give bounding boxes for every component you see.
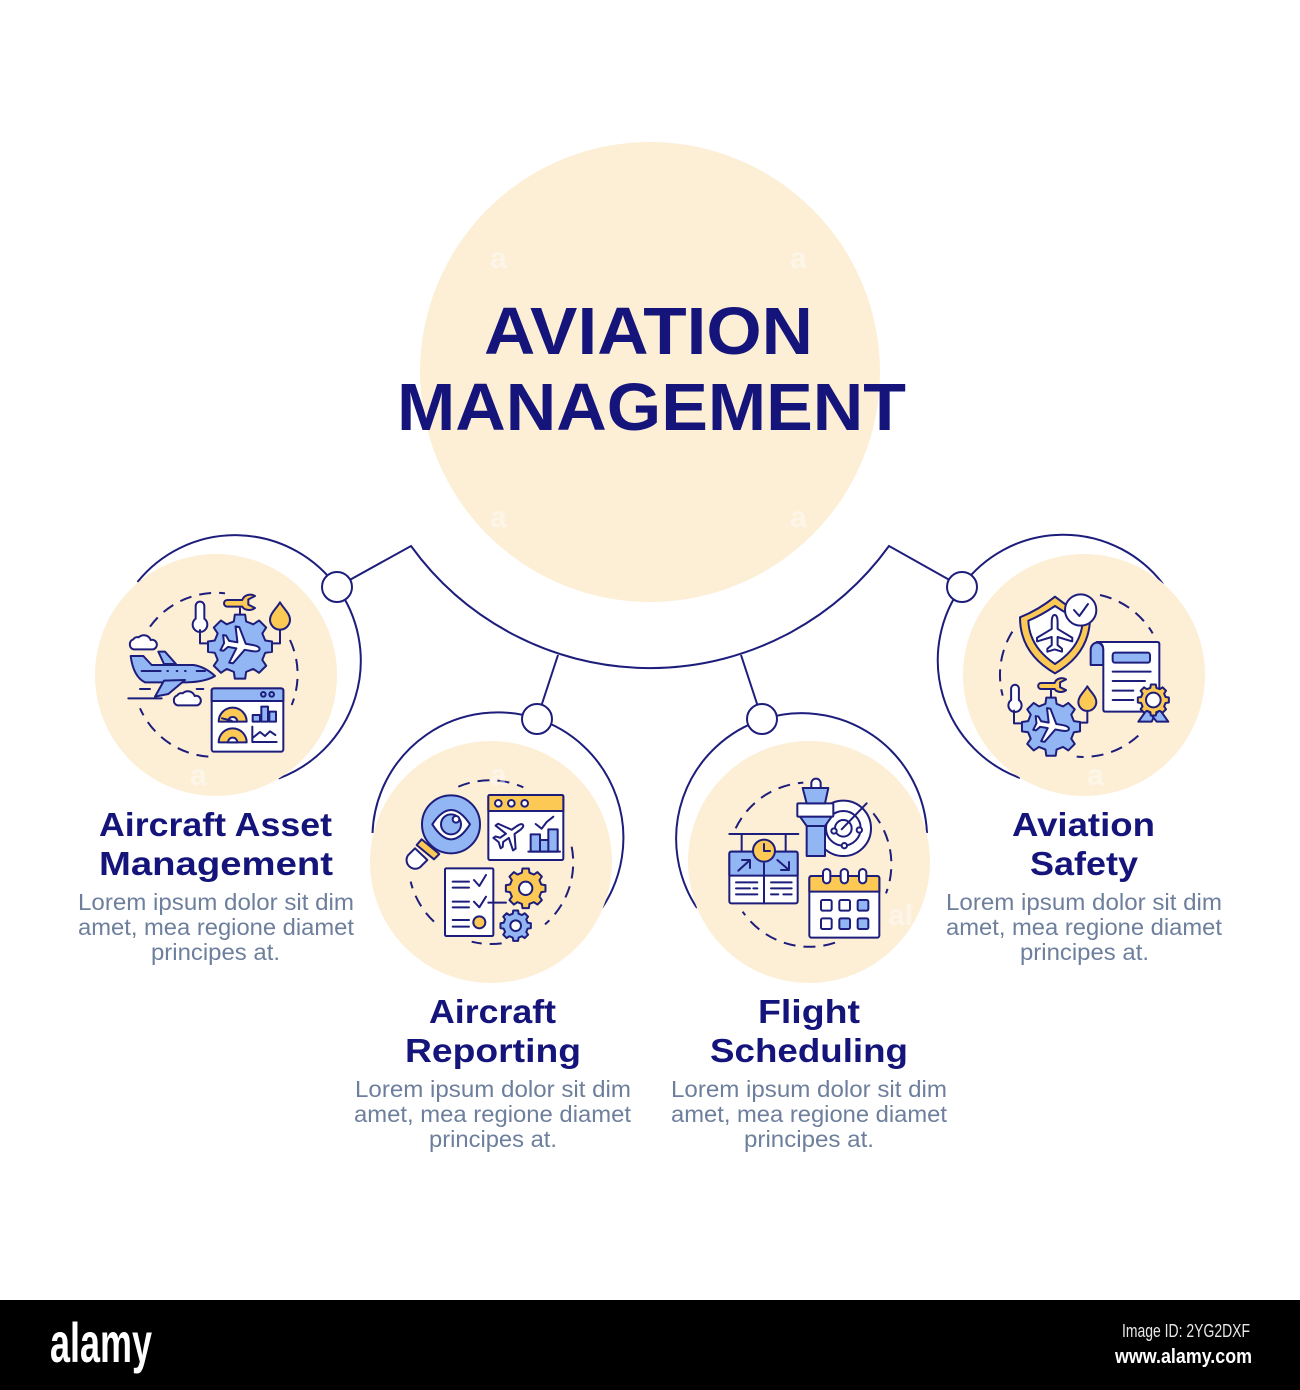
- footer logo: alamy: [50, 1311, 152, 1374]
- panel: aircraft reporting: [370, 704, 623, 983]
- node: [747, 704, 777, 734]
- watermark marks: a: [490, 242, 507, 275]
- ring: [138, 535, 361, 778]
- title: MANAGEMENT: [397, 370, 906, 445]
- watermark marks: [190, 242, 1104, 932]
- ring: [676, 713, 927, 908]
- panel: aircraft asset management: [95, 535, 361, 796]
- watermark marks: a: [790, 501, 807, 534]
- footer url: www.alamy.com: [1114, 1346, 1252, 1368]
- heading: aviation safety: Aviation: [1012, 806, 1155, 843]
- watermark marks: a: [490, 759, 507, 792]
- image id: Image ID: 2YG2DXF: [1122, 1321, 1250, 1341]
- text: aircraft asset management description: Lorem ipsum dolor sit dim: [78, 889, 354, 915]
- badge circle: [963, 554, 1205, 796]
- badge circle: [370, 741, 612, 983]
- text: flight scheduling description: principes at.: [744, 1126, 874, 1152]
- text: aviation safety description: principes at.: [1020, 939, 1149, 965]
- panel: flight scheduling: [676, 704, 930, 983]
- title: [397, 294, 906, 445]
- heading: aviation safety: Safety: [1030, 845, 1139, 882]
- text: aircraft asset management description: amet, mea regione diamet: [78, 914, 355, 940]
- text: flight scheduling description: Lorem ipsum dolor sit dim: [671, 1076, 947, 1102]
- text: aviation safety description: Lorem ipsum dolor sit dim: [946, 889, 1222, 915]
- connector arc: [337, 546, 962, 719]
- watermark marks: a: [1087, 759, 1104, 792]
- heading: flight scheduling: [710, 993, 908, 1069]
- icon: aircraft maintenance: [128, 593, 298, 757]
- ring: [372, 712, 623, 908]
- text: aircraft asset management description: principes at.: [151, 939, 280, 965]
- heading: aircraft reporting: Aircraft: [429, 993, 556, 1030]
- heading: aircraft reporting: Reporting: [405, 1032, 581, 1069]
- watermark marks: al: [888, 899, 913, 932]
- watermark marks: a: [190, 759, 207, 792]
- node: [322, 572, 352, 602]
- icon: aviation safety: [1000, 594, 1169, 757]
- text: aircraft reporting description: [354, 1076, 632, 1152]
- title: AVIATION: [484, 294, 813, 369]
- footer bar: [0, 1300, 1300, 1390]
- watermark marks: a: [790, 242, 807, 275]
- text: flight scheduling description: amet, mea regione diamet: [671, 1101, 948, 1127]
- heading: aircraft asset management: [99, 806, 333, 882]
- text: aircraft reporting description: amet, mea regione diamet: [354, 1101, 632, 1127]
- icon: flight scheduling: [729, 779, 891, 947]
- text: flight scheduling description: [671, 1076, 948, 1152]
- heading: aircraft asset management: Aircraft Asset: [99, 806, 332, 843]
- heading: aircraft asset management: Management: [99, 845, 333, 882]
- text: aircraft reporting description: Lorem ipsum dolor sit dim: [355, 1076, 631, 1102]
- icon: aircraft reporting: [407, 780, 573, 944]
- ring: [938, 535, 1163, 778]
- text: aircraft reporting description: principes at.: [429, 1126, 557, 1152]
- badge circle: [688, 741, 930, 983]
- heading: flight scheduling: Scheduling: [710, 1032, 908, 1069]
- heading: flight scheduling: Flight: [758, 993, 860, 1030]
- central circle: [420, 142, 880, 602]
- heading: aircraft reporting: [405, 993, 581, 1069]
- heading: aviation safety: [1012, 806, 1155, 882]
- node: [947, 572, 977, 602]
- text: aviation safety description: [946, 889, 1223, 965]
- watermark marks: a: [490, 501, 507, 534]
- text: aviation safety description: amet, mea regione diamet: [946, 914, 1223, 940]
- panel: aviation safety: [938, 535, 1205, 796]
- text: aircraft asset management description: [78, 889, 355, 965]
- badge circle: [95, 554, 337, 796]
- node: [522, 704, 552, 734]
